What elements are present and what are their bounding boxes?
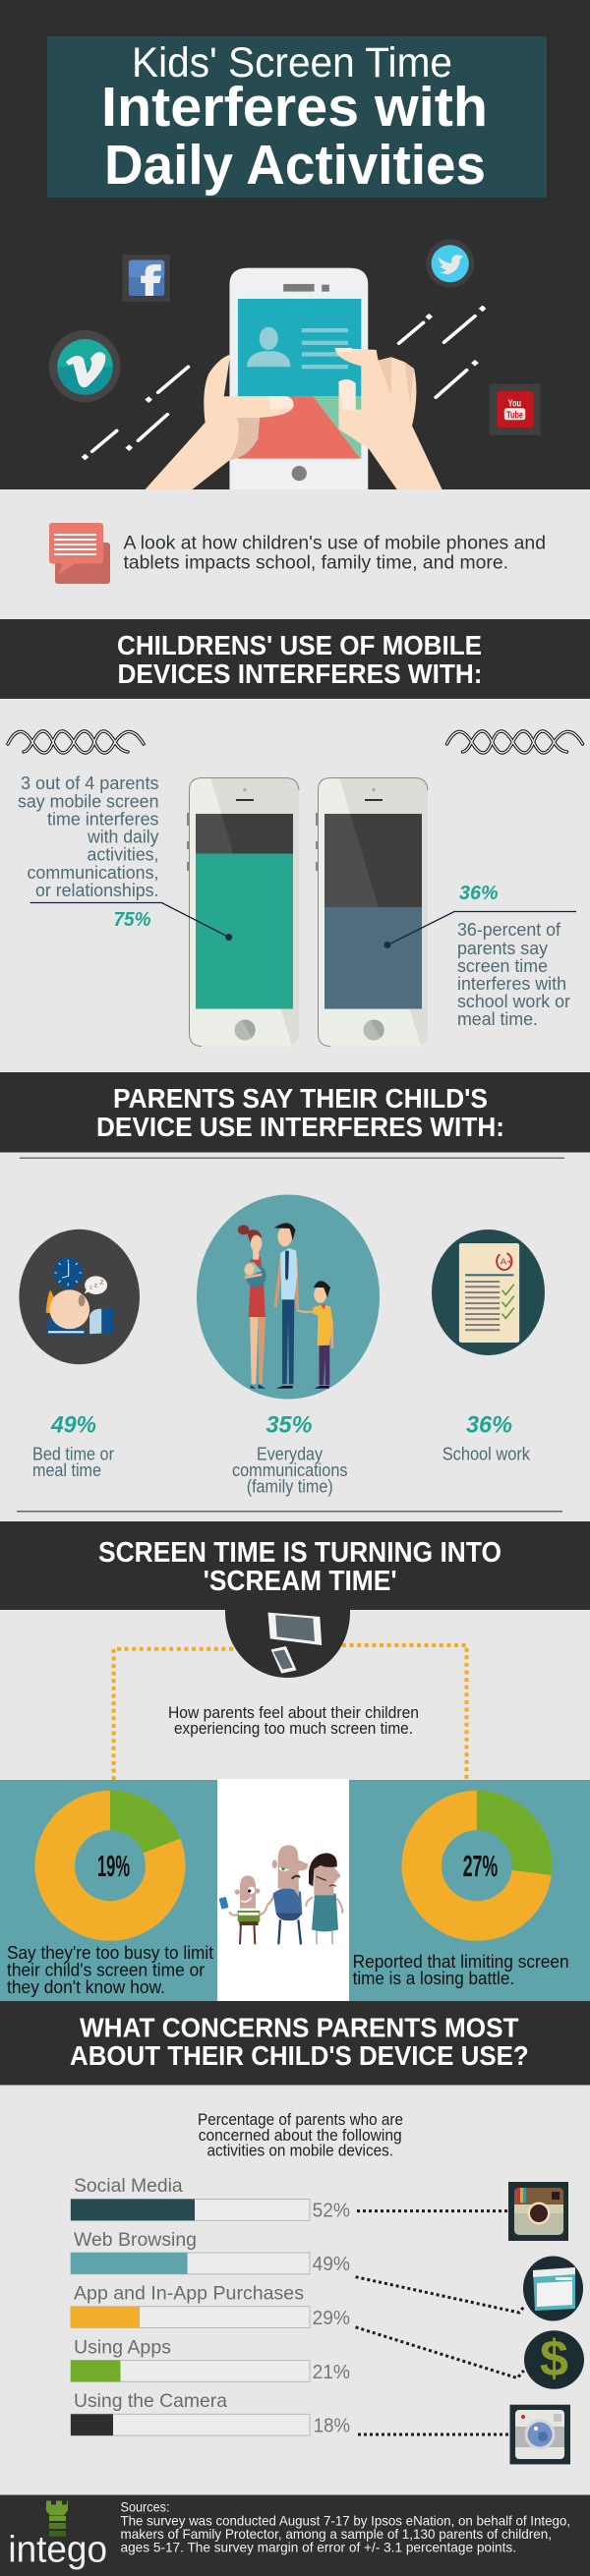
panel: 27% losing battle xyxy=(349,1780,590,2001)
bar: using apps 21% xyxy=(71,2336,350,2383)
section heading: scream time xyxy=(0,1521,590,1610)
icon: web browser xyxy=(523,2257,583,2321)
bar: app purchases 29% xyxy=(71,2283,350,2329)
motion dashes xyxy=(82,306,486,460)
text: how parents feel xyxy=(168,1703,419,1738)
title: Interferes with xyxy=(101,76,488,139)
bar: web browsing 49%: Web Browsing xyxy=(74,2229,197,2251)
text: too busy: their child's screen time or xyxy=(7,1960,205,1980)
section heading: parents say xyxy=(0,1072,590,1152)
stat: 36%: 36% xyxy=(459,883,499,904)
stat: 36% school work: 36% xyxy=(466,1411,512,1439)
bar: social media 52% xyxy=(71,2175,350,2221)
icon: family xyxy=(197,1195,380,1400)
text: 3 out of 4 parents: time interferes xyxy=(47,810,159,830)
footer xyxy=(0,2494,590,2576)
callout line: 75% xyxy=(30,902,232,941)
bar: web browsing 49%: 49% xyxy=(313,2253,350,2275)
text: 36-percent of parents: school work or xyxy=(457,992,570,1011)
text: percentage of parents: activities on mobile devices. xyxy=(206,2143,393,2160)
icon: camera xyxy=(509,2405,570,2464)
bar: web browsing 49% xyxy=(71,2229,350,2275)
text: losing battle: time is a losing battle. xyxy=(353,1968,514,1988)
stat: 49% bed time: 49% xyxy=(50,1411,96,1439)
icon: youtube: You xyxy=(508,398,521,409)
section heading: scream time: SCREEN TIME IS TURNING INTO xyxy=(98,1537,502,1569)
boy xyxy=(297,1281,333,1389)
text: losing battle xyxy=(353,1951,569,1988)
section heading: what concerns parents xyxy=(0,2001,590,2086)
stat: 35% family time: 35% xyxy=(266,1411,313,1439)
text: losing battle: Reported that limiting screen xyxy=(353,1951,569,1972)
text: 3 out of 4 parents xyxy=(18,773,159,900)
stat: 49% bed time xyxy=(32,1411,114,1480)
stat: 35% family time xyxy=(232,1411,348,1496)
icon: sleeping child with clock: z xyxy=(94,1283,98,1288)
phone meter: 75% xyxy=(187,777,299,1046)
text: 3 out of 4 parents: with daily xyxy=(87,828,159,847)
sources: makers of Family Protector, among a sample of 1,130 parents of children, xyxy=(120,2526,552,2542)
text: too busy: Say they're too busy to limit xyxy=(7,1942,213,1963)
dotted connector: left xyxy=(114,1649,233,1784)
bar: app purchases 29%: App and In-App Purchases xyxy=(74,2283,304,2305)
icon: twitter xyxy=(426,239,474,288)
panel: angry family illustration xyxy=(217,1779,349,2001)
icon: youtube: Tube xyxy=(506,410,523,421)
ornament: right twist xyxy=(446,731,582,753)
text: how parents feel: experiencing too much screen time. xyxy=(174,1719,413,1738)
text: 36-percent of parents: parents say xyxy=(457,939,548,958)
text: 3 out of 4 parents: say mobile screen xyxy=(18,792,159,812)
text: 36-percent of parents xyxy=(457,920,570,1029)
callout line: 36% xyxy=(384,912,576,948)
sources: Sources: xyxy=(120,2499,169,2515)
text: percentage of parents: Percentage of parents who are xyxy=(198,2111,403,2129)
bar: using the camera 18%: 18% xyxy=(314,2414,350,2436)
stat: 36% school work xyxy=(442,1411,531,1464)
text: 3 out of 4 parents: or relationships. xyxy=(35,881,159,900)
stat: 36% school work: School work xyxy=(442,1445,531,1464)
kid xyxy=(219,1875,267,1944)
icon: vimeo xyxy=(49,330,120,402)
section heading: childrens' use xyxy=(0,619,590,699)
icon: school test paper xyxy=(432,1230,545,1355)
section heading: scream time: 'SCREAM TIME' xyxy=(204,1566,397,1597)
title: Kids' Screen Time xyxy=(132,39,452,86)
bar: using apps 21%: Using Apps xyxy=(74,2336,171,2358)
intro: speech bubble icon xyxy=(49,523,110,584)
panel: 19% too busy xyxy=(0,1780,217,2001)
stat: 49% bed time: Bed time or xyxy=(32,1445,114,1464)
icon: dollar: $ xyxy=(540,2330,568,2387)
dotted connector: right xyxy=(342,1645,466,1780)
stat: 35% family time: Everyday xyxy=(257,1445,323,1464)
donut chart: 27%: 27% xyxy=(463,1849,498,1883)
woman xyxy=(238,1225,266,1389)
icon: instagram xyxy=(508,2182,568,2241)
stat: 35% family time: (family time) xyxy=(247,1476,333,1496)
ornament: left twist xyxy=(8,731,144,753)
text: 36-percent of parents: 36-percent of xyxy=(457,920,561,940)
donut chart: 27% xyxy=(401,1791,552,1941)
icon: dollar xyxy=(524,2330,584,2389)
bar: using the camera 18%: Using the Camera xyxy=(74,2390,227,2412)
donut chart: 19%: 19% xyxy=(97,1849,130,1883)
text: 3 out of 4 parents: activities, xyxy=(87,845,159,865)
man xyxy=(274,1223,297,1389)
mother xyxy=(306,1853,342,1944)
bar: using the camera 18% xyxy=(71,2390,350,2436)
section heading: parents say: DEVICE USE INTERFERES WITH: xyxy=(96,1112,504,1142)
sources xyxy=(120,2499,570,2555)
icon: school test paper: A+ xyxy=(501,1257,512,1267)
text: 36-percent of parents: interferes with xyxy=(457,974,566,994)
icon: sleeping child with clock: z xyxy=(89,1286,92,1291)
section heading: what concerns parents: ABOUT THEIR CHILD'S DEVICE USE? xyxy=(70,2040,529,2071)
bar chart: parent concerns xyxy=(71,2175,350,2436)
text: 36-percent of parents: meal time. xyxy=(457,1009,538,1029)
icon: facebook xyxy=(122,255,170,302)
bar: using apps 21%: 21% xyxy=(313,2361,350,2383)
stat: 35% family time: communications xyxy=(232,1460,348,1480)
donut chart: 19% xyxy=(35,1791,185,1941)
icon: tablet and phone badge xyxy=(225,1610,350,1678)
text: 3 out of 4 parents: 3 out of 4 parents xyxy=(21,773,159,793)
title xyxy=(47,36,547,198)
logo: intego tower: intego xyxy=(8,2530,107,2571)
intro text: tablets impacts school, family time, and more. xyxy=(124,552,508,574)
intro text xyxy=(124,533,546,574)
text: how parents feel: How parents feel about their children xyxy=(168,1703,419,1722)
icon: youtube xyxy=(490,384,541,435)
section heading: childrens' use: DEVICES INTERFERES WITH: xyxy=(118,658,482,689)
intro text: A look at how children's use of mobile phones and xyxy=(124,533,546,554)
phone xyxy=(229,268,368,489)
left hand xyxy=(145,355,294,489)
stat: 49% bed time: meal time xyxy=(32,1460,101,1480)
title: Daily Activities xyxy=(104,134,486,197)
icon: sleeping child with clock xyxy=(19,1230,140,1364)
hero illustration: phone held in hands with social icons xyxy=(49,239,541,489)
dotted connectors: bars to icons xyxy=(356,2211,525,2434)
section heading: childrens' use: CHILDRENS' USE OF MOBILE xyxy=(117,630,482,660)
stat: 75%: 75% xyxy=(114,909,151,931)
logo: intego tower xyxy=(8,2500,107,2571)
bar: social media 52%: 52% xyxy=(313,2200,350,2221)
text: too busy: they don't know how. xyxy=(7,1976,165,1997)
right hand xyxy=(335,348,442,489)
bar: social media 52%: Social Media xyxy=(74,2175,183,2197)
icon: sleeping child with clock: z xyxy=(99,1278,104,1287)
text: 3 out of 4 parents: communications, xyxy=(28,863,159,883)
section heading: parents say: PARENTS SAY THEIR CHILD'S xyxy=(113,1083,488,1114)
phone meter: 36% xyxy=(316,777,428,1046)
text: 36-percent of parents: screen time xyxy=(457,956,548,976)
bar: app purchases 29%: 29% xyxy=(313,2307,350,2329)
text: too busy xyxy=(7,1942,213,1997)
father xyxy=(267,1845,308,1944)
text: percentage of parents xyxy=(198,2111,403,2160)
sources: The survey was conducted August 7-17 by Ipsos eNation, on behalf of Intego, xyxy=(120,2512,570,2528)
section heading: what concerns parents: WHAT CONCERNS PARENTS MOST xyxy=(80,2013,519,2043)
text: percentage of parents: concerned about the following xyxy=(199,2127,402,2145)
sources: ages 5-17. The survey margin of error of +/- 3.1 percentage points. xyxy=(120,2540,516,2555)
